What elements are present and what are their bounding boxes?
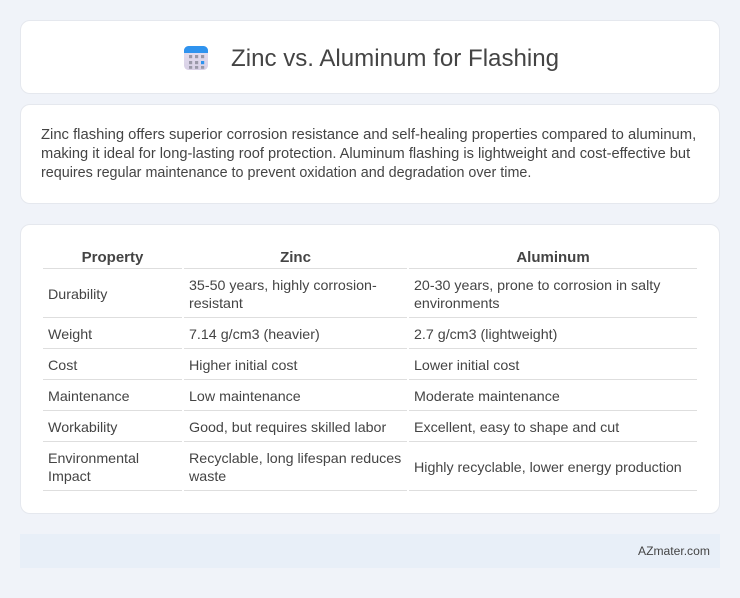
header: Zinc: Zinc	[280, 249, 311, 266]
footer text: AZmater.com	[638, 544, 710, 558]
Maintenance zinc: Low maintenance	[189, 389, 301, 405]
title: Zinc vs. Aluminum for Flashing	[231, 45, 559, 72]
Durability aluminum: environments	[414, 296, 500, 312]
row: Workability: Workability	[48, 420, 117, 436]
Durability aluminum: 20-30 years, prone to corrosion in salty	[414, 278, 660, 294]
Cost aluminum: Lower initial cost	[414, 358, 519, 374]
row: Durability: Durability	[48, 287, 107, 303]
row: Weight: Weight	[48, 327, 92, 343]
icon: calendar	[184, 46, 208, 70]
Environmental zinc: Recyclable, long lifespan reduces	[189, 451, 401, 467]
panel: comparison table card	[20, 224, 720, 514]
Workability zinc: Good, but requires skilled labor	[189, 420, 386, 436]
Durability zinc	[189, 278, 377, 312]
row: Environmental Impact: Impact	[48, 469, 91, 485]
header: Property: Property	[82, 249, 143, 266]
row: Cost: Cost	[48, 358, 77, 374]
intro text: requires regular maintenance to prevent oxidation and degradation over time.	[41, 165, 531, 181]
Weight zinc: 7.14 g/cm3 (heavier)	[189, 327, 320, 343]
panel: intro card	[20, 104, 720, 204]
Cost zinc: Higher initial cost	[189, 358, 298, 374]
row: Maintenance: Maintenance	[48, 389, 130, 405]
Maintenance aluminum: Moderate maintenance	[414, 389, 560, 405]
Workability aluminum: Excellent, easy to shape and cut	[414, 420, 619, 436]
intro text	[41, 127, 696, 181]
Environmental zinc: waste	[189, 469, 226, 485]
row: Environmental Impact	[48, 451, 139, 485]
header: Aluminum: Aluminum	[516, 249, 590, 266]
intro text: Zinc flashing offers superior corrosion resistance and self-healing properties compared to aluminum,	[41, 127, 696, 143]
Environmental zinc	[189, 451, 401, 485]
panel: title card	[20, 20, 720, 94]
Durability zinc: 35-50 years, highly corrosion-	[189, 278, 377, 294]
Weight aluminum: 2.7 g/cm3 (lightweight)	[414, 327, 557, 343]
intro text: making it ideal for long-lasting roof protection. Aluminum flashing is lightweight and cost-effective but	[41, 146, 690, 162]
Durability aluminum	[414, 278, 660, 312]
row: Environmental Impact: Environmental	[48, 451, 139, 467]
Durability zinc: resistant	[189, 296, 243, 312]
Environmental aluminum: Highly recyclable, lower energy production	[414, 460, 682, 476]
footer bar	[20, 534, 720, 568]
